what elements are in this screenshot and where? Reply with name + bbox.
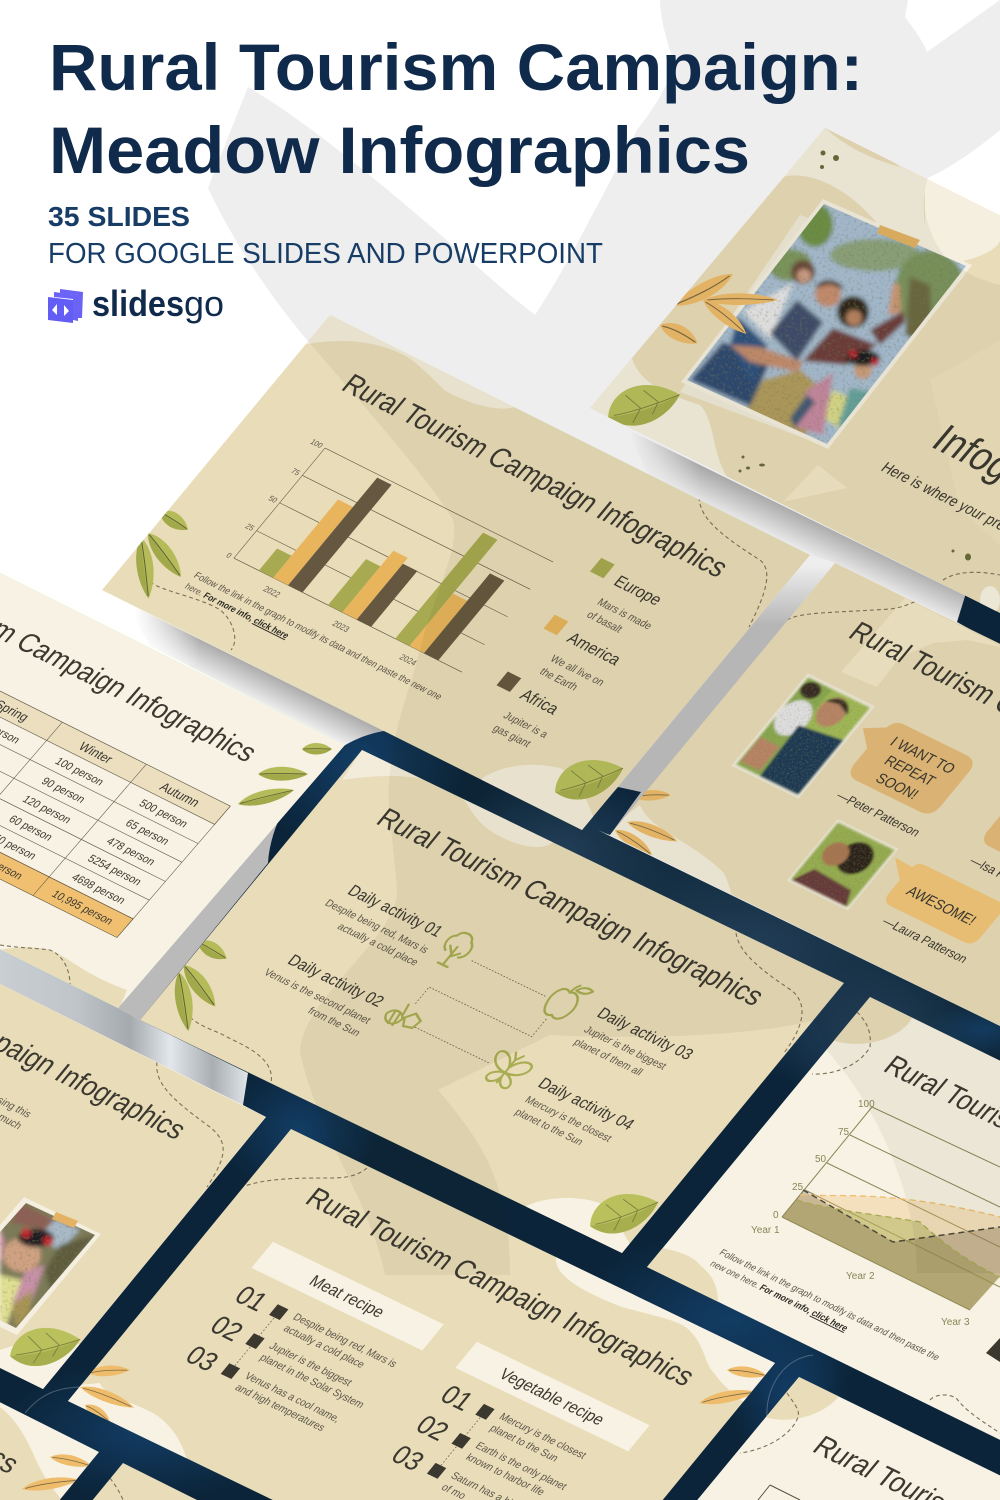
panel: slide F recipes — [55, 1120, 785, 1500]
chart labels: Year 2 — [846, 1271, 875, 1282]
slide H dashed curves — [812, 1012, 1000, 1433]
meat recipe column: Despite being red, Mars is — [290, 1312, 399, 1370]
photo: smiling man — [731, 673, 875, 799]
chart labels: Year 3 — [941, 1317, 970, 1328]
chart labels: Year 1 — [751, 1225, 780, 1236]
panel: slide A family photo — [580, 120, 1000, 630]
slide I dashed curve — [740, 1393, 798, 1453]
slide I table outline — [758, 1485, 800, 1500]
table: 4698 person — [69, 872, 128, 907]
bar chart: 2023 — [330, 619, 352, 634]
activity 01: actually a cold place — [335, 922, 420, 969]
slide F orange leaves right — [698, 1364, 767, 1408]
background watermark shape — [208, 0, 1000, 1275]
table: Autumn — [157, 779, 203, 810]
panel: slide E testimonials — [600, 555, 1000, 1045]
slide F title: Rural Tourism Campaign Infographics — [300, 1182, 702, 1392]
panel: slide D daily activities — [130, 740, 855, 1265]
activity 04 — [512, 1075, 638, 1161]
slide A right light area — [930, 340, 1000, 545]
slide D olive leaf — [584, 1184, 663, 1241]
bubble 1: REPEAT — [880, 753, 939, 790]
legend — [492, 558, 660, 748]
photo: girl with binoculars — [0, 1195, 105, 1335]
table: Winter — [75, 739, 117, 767]
decorative dots — [738, 150, 971, 560]
activity 02: Daily activity 02 — [284, 951, 388, 1011]
title — [49, 30, 863, 187]
caption: here. For more info, click here — [183, 581, 292, 640]
icon: butterfly — [479, 1046, 536, 1092]
activity 02: from the Sun — [305, 1006, 362, 1039]
panel: slide H area chart — [640, 990, 1000, 1455]
slide E dashed curve — [788, 602, 915, 620]
activity 02 — [251, 947, 390, 1039]
table: 478 person — [103, 836, 157, 868]
legend: We all live on — [547, 653, 607, 689]
slide L dashed curve — [110, 1478, 123, 1500]
meat recipe column: 01 — [229, 1280, 274, 1317]
meat recipe column: actually a cold place — [281, 1324, 367, 1371]
activity 01 — [312, 877, 448, 969]
tape — [877, 225, 920, 248]
slide K tan blob — [0, 1405, 62, 1500]
area chart — [782, 1107, 1000, 1310]
chart labels: 0 — [773, 1210, 779, 1221]
activity 01: Daily activity 01 — [344, 882, 447, 941]
bar chart: 75 — [289, 466, 302, 477]
slide E cream blob — [610, 805, 732, 894]
shadow: under chart slide — [120, 595, 392, 746]
legend: Mars is made — [594, 596, 655, 632]
logo: slidesgo — [48, 283, 224, 324]
title: Meadow Infographics — [49, 113, 750, 187]
slide E leaves — [615, 790, 678, 856]
bubble 2: AWESOME! — [903, 884, 979, 929]
slide C dashed curve — [0, 945, 70, 985]
photo: smiling woman — [787, 819, 899, 910]
activity 01: Despite being red, Mars is — [322, 898, 430, 956]
bubble 2 — [886, 858, 1000, 944]
slide K leaves — [21, 1451, 92, 1494]
vegetable recipe column: known to harbor life — [463, 1452, 547, 1498]
legend: Europe — [610, 573, 666, 609]
slide G dashed curve — [157, 1062, 223, 1187]
legend: America — [563, 629, 625, 669]
table: 500 person — [136, 798, 190, 830]
table: 100 person — [52, 756, 106, 788]
table: 60 person — [6, 814, 55, 844]
activity 04: Mercury is the closest — [522, 1095, 614, 1145]
activity 03: Jupiter is the biggest — [581, 1025, 668, 1072]
panel: slide B column chart — [90, 305, 820, 840]
caption: Follow the link in the graph to modify its data and then paste the new one — [192, 570, 445, 702]
slide A cream shapes — [585, 120, 1000, 478]
slide B dashed curves — [150, 497, 767, 650]
chart labels — [751, 1099, 970, 1328]
activity 02: Venus is the second planet — [261, 967, 373, 1027]
slide D cream corner — [342, 750, 553, 847]
slide G olive leaf — [6, 1321, 84, 1371]
slide H caption: new one here. For more info, click here — [708, 1258, 850, 1333]
panel: slide L bottom — [60, 1455, 310, 1500]
slide A title — [881, 424, 1000, 530]
bubble 3 — [984, 816, 1000, 852]
bar chart: 25 — [243, 522, 256, 533]
vegetable recipe column: Earth is the only planet — [473, 1441, 569, 1493]
slide B olive leaf — [555, 760, 624, 800]
vegetable recipe column: Vegetable recipe — [495, 1365, 608, 1429]
bar chart: 50 — [266, 494, 280, 505]
slide F dashed curve — [242, 1168, 367, 1187]
vegetable recipe column: 03 — [385, 1440, 430, 1476]
chart labels: 75 — [838, 1127, 850, 1138]
bar chart — [226, 440, 554, 672]
legend: Jupiter is a — [500, 710, 551, 741]
meat recipe column: Jupiter is the biggest — [266, 1341, 354, 1389]
bar chart: 2024 — [397, 653, 419, 668]
chart labels: 100 — [858, 1099, 875, 1110]
table: 90 person — [39, 776, 87, 806]
slide B title: Rural Tourism Campaign Infographics — [336, 367, 736, 583]
slide I tan blob — [765, 1377, 840, 1420]
panel: slide G girl with binoculars — [0, 931, 280, 1400]
legend: of basalt — [584, 609, 625, 635]
vegetable recipe column: 02 — [410, 1410, 455, 1446]
icon: apple — [539, 978, 594, 1024]
activity 03 — [571, 1004, 697, 1091]
dashed curve — [943, 572, 1000, 580]
subtitle: 35 SLIDES — [48, 201, 190, 232]
meat recipe column: Venus has a cool name, — [242, 1371, 342, 1425]
slide D dashed curves — [190, 933, 802, 1083]
subtitle — [48, 201, 603, 270]
slide H tan blobs — [640, 997, 912, 1303]
panel: slide C table — [0, 554, 360, 1020]
vegetable recipe column — [378, 1342, 650, 1500]
slide D title: Rural Tourism Campaign Infographics — [371, 802, 771, 1012]
title: Rural Tourism Campaign: — [49, 30, 863, 104]
slide E title and testimonials — [732, 622, 1000, 963]
watermark tint over slides — [208, 0, 1000, 1275]
table — [0, 680, 230, 938]
panel: slide K bottom left — [0, 1265, 110, 1500]
shadow: strip beside table slide — [118, 730, 392, 1020]
panel: slide I table chart — [690, 1370, 1000, 1500]
slide D cream blob bottom — [525, 1198, 640, 1262]
slide A top tan blob — [825, 128, 900, 167]
slide C bottom blob — [0, 947, 127, 1012]
legend: Africa — [516, 686, 563, 719]
subtitle: FOR GOOGLE SLIDES AND POWERPOINT — [48, 238, 603, 270]
shadow: under slide A — [600, 400, 966, 622]
vegetable recipe column: 01 — [434, 1380, 480, 1416]
meat recipe column: and high temperatures — [232, 1383, 327, 1434]
leaves orange — [660, 274, 778, 344]
slide H legend swatch — [986, 1338, 1000, 1362]
chart labels: 50 — [815, 1154, 827, 1165]
vegetable recipe column: Mercury is the closest — [496, 1412, 588, 1462]
slide H caption: Follow the link in the graph to modify its data and then paste the — [717, 1247, 942, 1362]
meat recipe column: Meat recipe — [305, 1272, 388, 1321]
connector lines — [401, 953, 559, 1070]
bubble 1 — [850, 722, 973, 814]
legend: gas giant — [490, 723, 533, 750]
bubble 1: I WANT TO — [886, 734, 958, 777]
photo: family — [680, 195, 975, 450]
table: 5254 person — [85, 853, 144, 888]
quote 2 author: —Laura Patterson — [879, 914, 971, 966]
slide B bottom cream blob — [481, 764, 593, 830]
icon: tree — [432, 928, 480, 970]
bar chart: 100 — [308, 437, 325, 450]
slide F orange leaves left — [78, 1364, 136, 1426]
vegetable recipe column: planet to the Sun — [487, 1423, 560, 1464]
slide A light wedge — [783, 465, 847, 502]
icon: bee — [381, 999, 427, 1034]
navy backdrop frames — [0, 596, 1000, 1500]
slide C leaves — [236, 743, 332, 810]
legend: the Earth — [537, 666, 580, 693]
bar chart: 2022 — [261, 585, 283, 600]
tape — [52, 1212, 78, 1228]
slide F cream blobs — [60, 1257, 780, 1460]
bubble 1: SOON! — [872, 771, 921, 803]
table: 65 person — [123, 818, 171, 848]
shadow: strip between chart slide and testimonial slide — [582, 555, 835, 835]
activity 04: planet to the Sun — [512, 1107, 585, 1148]
meat recipe column: planet in the Solar System — [257, 1353, 366, 1411]
table: 120 person — [19, 794, 73, 826]
slide G cream corner — [0, 1337, 80, 1389]
wordmark: slides — [92, 283, 184, 324]
bar chart: 0 — [224, 551, 234, 560]
slide E bright patch — [841, 598, 1000, 687]
slide D leaves — [171, 935, 230, 1032]
back paper — [680, 215, 965, 446]
logo: slidesgo: go — [184, 283, 224, 324]
slide B cream corner — [302, 315, 515, 409]
activity 03: Daily activity 03 — [593, 1004, 697, 1064]
activity 03: planet of them all — [571, 1037, 645, 1078]
icon: slidesgo stack — [48, 289, 83, 323]
chart labels: 25 — [792, 1182, 804, 1193]
quote 1 author: —Peter Patterson — [833, 789, 923, 839]
leaf olive — [608, 385, 680, 426]
meat recipe column: 03 — [180, 1340, 225, 1377]
meat recipe column — [173, 1242, 444, 1446]
cream blob at bottom right — [980, 586, 1000, 611]
table: 10,995 person — [49, 889, 115, 927]
shadow: strip under table slide — [0, 949, 248, 1105]
meat recipe column: 02 — [204, 1310, 249, 1347]
activity 04: Daily activity 04 — [534, 1075, 638, 1134]
slide B leaves — [136, 510, 188, 598]
